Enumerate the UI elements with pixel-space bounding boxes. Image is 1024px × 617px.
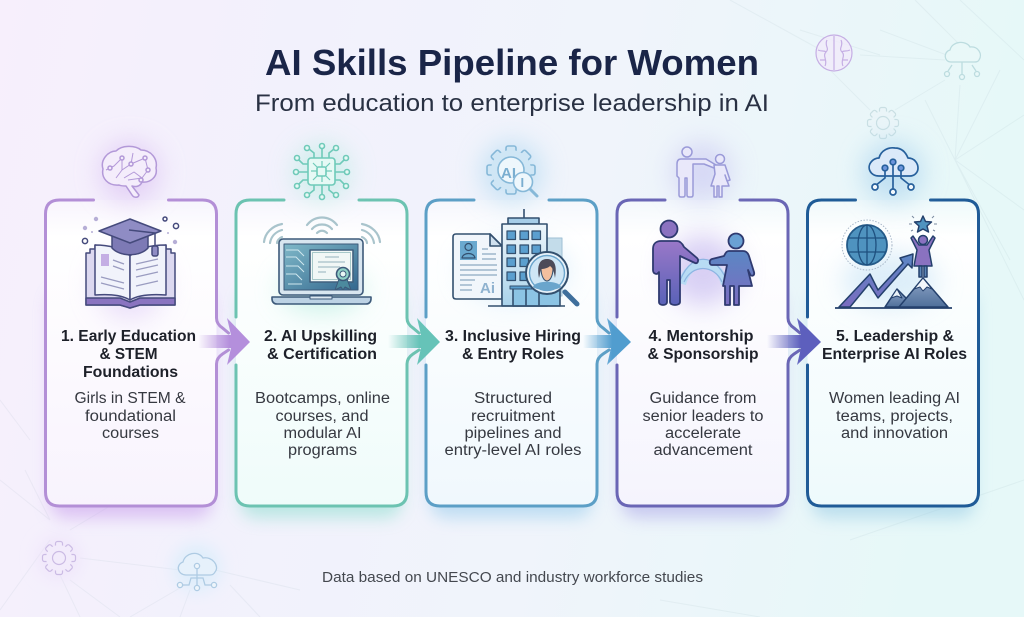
background icon: brain: [816, 35, 852, 71]
step 1 heading: [61, 328, 196, 381]
step 3 heading: 3. Inclusive Hiring: [445, 328, 581, 345]
icon: adult guiding child: [672, 142, 732, 202]
title: AI Skills Pipeline for Women: [265, 42, 759, 83]
step 4 description: [642, 390, 764, 459]
step 1 description: Girls in STEM &: [74, 390, 186, 407]
step 2 heading: & Certification: [267, 346, 377, 363]
step 1 heading: Foundations: [83, 364, 178, 381]
step 3 description: Structured: [474, 390, 552, 407]
panel: step 3 inclusive hiring: [426, 142, 609, 518]
step 2 description: programs: [288, 442, 357, 459]
icon: cloud network: [863, 142, 923, 202]
step 2 heading: 2. AI Upskilling: [264, 328, 377, 345]
step 1 description: courses: [102, 425, 159, 442]
panel: step 5 leadership: [808, 142, 978, 518]
arrow: step 3 to 4: [583, 318, 631, 365]
step 2 heading: [264, 328, 377, 363]
subtitle: From education to enterprise leadership in AI: [255, 90, 769, 117]
step 5 heading: 5. Leadership &: [836, 328, 954, 345]
arrow: step 1 to 2: [198, 318, 250, 365]
step 5 description: Women leading AI: [829, 390, 960, 407]
icon: AI gear with magnifier: I: [520, 175, 524, 190]
step 2 description: Bootcamps, online: [255, 390, 390, 407]
step 4 heading: [648, 328, 759, 363]
icon: AI chip: [294, 144, 350, 200]
step 3 heading: [445, 328, 581, 363]
panel: step 1 early education: [46, 142, 228, 518]
step 3 description: [444, 390, 582, 459]
background icon: gear bottom left: [37, 536, 81, 580]
arrow: step 4 to 5: [767, 318, 821, 365]
step 3 description: entry-level AI roles: [444, 442, 582, 459]
step 2 description: [255, 390, 390, 459]
icon: resume, building and magnifier: Ai: [480, 280, 495, 297]
step 1 description: foundational: [85, 408, 176, 425]
step 5 description: and innovation: [841, 425, 948, 442]
step 5 heading: Enterprise AI Roles: [822, 346, 967, 363]
icon: mentor and mentee with bridge: [653, 220, 754, 306]
step 4 description: advancement: [654, 442, 753, 459]
panel: step 4 mentorship: [617, 142, 800, 518]
step 4 description: Guidance from: [650, 390, 756, 407]
step 1 heading: 1. Early Education: [61, 328, 196, 345]
step 5 description: teams, projects,: [836, 408, 953, 425]
step 4 description: accelerate: [665, 425, 741, 442]
step 4 description: senior leaders to: [642, 408, 764, 425]
footer source note: Data based on UNESCO and industry workforce studies: [322, 570, 703, 586]
step 4 heading: & Sponsorship: [648, 346, 759, 363]
icon: laptop with certificate: [264, 218, 380, 312]
icon: resume, building and magnifier: [453, 209, 577, 306]
step 1 description: [74, 390, 186, 442]
step 3 description: recruitment: [471, 408, 556, 425]
background icon: cloud bottom left: [173, 544, 221, 592]
icon: AI gear with magnifier: [482, 142, 542, 202]
icon: globe, growth arrow, mountain and woman with star: [835, 216, 952, 308]
background icon: gear: [868, 108, 898, 138]
icon: brain: [100, 142, 160, 202]
step 3 heading: & Entry Roles: [462, 346, 564, 363]
step 2 description: courses, and: [276, 408, 368, 425]
step 3 description: pipelines and: [464, 425, 562, 442]
background icon: cloud network: [944, 42, 980, 80]
step 4 heading: 4. Mentorship: [648, 328, 754, 345]
step 5 description: [829, 390, 960, 442]
step 5 heading: [822, 328, 967, 363]
icon: AI gear with magnifier: AI: [501, 165, 516, 182]
step 1 heading: & STEM: [100, 346, 158, 363]
panel: step 2 upskilling: [236, 144, 419, 518]
icon: book and graduation cap: [82, 217, 179, 320]
step 2 description: modular AI: [284, 425, 362, 442]
arrow: step 2 to 3: [388, 318, 440, 365]
